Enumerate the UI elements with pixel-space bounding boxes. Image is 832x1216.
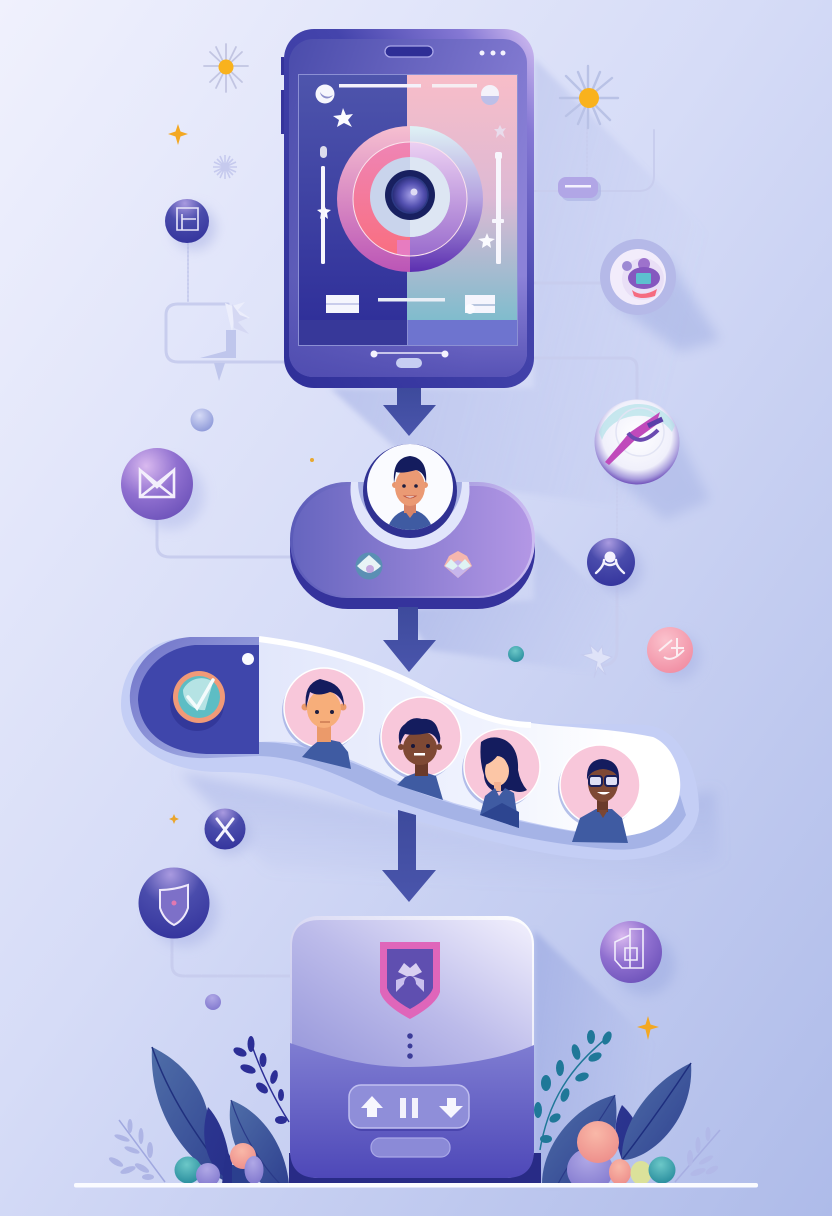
device button [371,1138,450,1157]
band left rim [130,637,259,758]
mid leaf left [230,1100,289,1184]
connector lines [157,128,654,976]
icon badge: people at laptop [600,239,720,352]
band dark panel [138,645,259,754]
device body lower [290,1043,534,1178]
avatar cradle [351,444,470,549]
wavy team band [121,637,699,860]
icon badge: shield [138,868,218,946]
tiny gold star [169,814,179,824]
gold dot [310,458,314,462]
long shadows [180,58,720,1184]
band outer shell [121,638,699,860]
sun icon: upper right [560,66,618,128]
fern right [675,1127,720,1182]
pink ball icon [647,627,700,680]
crest shield [380,942,440,1019]
balls right [567,1121,676,1183]
icon badge: person [587,538,642,594]
control panel [349,1085,469,1131]
mid leaf right [542,1095,616,1184]
sun icon: upper left [204,44,248,92]
arrow 3 [382,810,436,902]
fern left [108,1119,165,1182]
icon badge: pencil tool ball [594,400,710,520]
screen sparkles [317,108,506,248]
icon badge: document [165,199,216,250]
teal sprig [534,1030,614,1150]
pill body [290,482,535,609]
camera dial [337,126,483,272]
dark leaf left [204,1107,232,1184]
phone home bar [370,350,448,368]
blue ball decoration [190,408,214,432]
phone face [289,39,527,377]
device dark base [289,1153,541,1184]
dark leaf right [616,1105,633,1159]
gold star right [637,1016,659,1040]
avatar: woman [462,729,540,828]
icon badge: crossed tools [204,808,250,855]
avatar: man with glasses [558,745,640,843]
icon badge: tablet lock [600,921,675,995]
white dot [242,653,254,665]
large leaf right [622,1063,691,1160]
check badge [170,671,225,731]
screen toggles [316,84,499,105]
phone dots [480,50,506,56]
arrow 2 [383,607,436,672]
avatar: man 2 [379,697,461,800]
pill icon left [356,552,382,580]
screen bottom controls [326,295,495,314]
band white surface [259,637,680,836]
arrow 1 [383,388,436,436]
device body upper [290,916,534,1178]
icon: broken arrow [200,302,250,381]
minus pill button [558,177,601,201]
phone speaker [385,46,433,57]
icon badge: envelope crown [121,448,204,529]
profile pill card [290,444,535,609]
phone device [281,29,534,388]
avatar: man in white circle [367,444,453,530]
screen sliders [320,146,504,264]
avatar: man 1 [282,668,364,769]
band lip [259,742,686,850]
purple sprig [232,1036,289,1124]
phone body [284,29,534,388]
flower decoration [582,645,612,678]
pill icon right [444,551,472,578]
ground line [74,1183,758,1188]
phone screen [298,74,518,346]
three dots [407,1033,413,1059]
plants right [534,1030,720,1192]
teal ball decoration [508,646,524,662]
large leaf left [151,1046,223,1180]
balls left [174,1143,264,1187]
small violet ball [205,994,221,1010]
phone side buttons [281,57,284,134]
snowflake burst [213,155,237,179]
plants left [108,1036,289,1187]
sparkle: gold star upper left [168,124,188,145]
bottom device [289,916,541,1184]
